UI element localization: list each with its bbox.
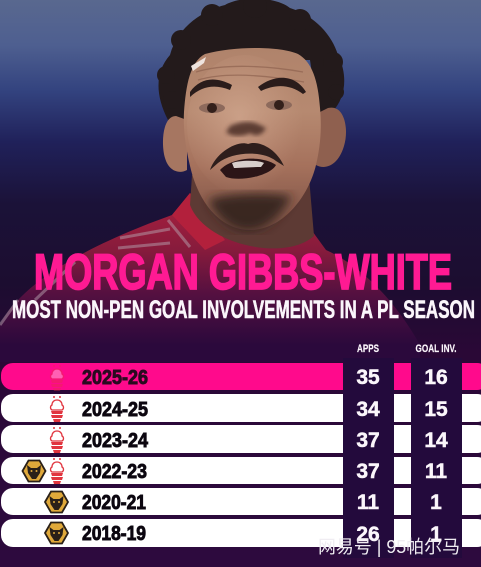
row: 2020-21: 2020-21 [82, 492, 146, 514]
row: 2022-23 [1, 457, 481, 484]
column: goal involvements: 16 [424, 366, 448, 389]
ears [163, 116, 187, 172]
column: goal involvements: 1 [430, 491, 442, 514]
forehead highlight [191, 57, 206, 71]
row: 2020-21 [1, 488, 481, 515]
column: goal involvements: 1 [430, 523, 442, 546]
right eye [266, 100, 292, 110]
hair [157, 0, 344, 120]
row: 2025-26: 2025-26 [82, 367, 148, 389]
column: goal involvements: 11 [425, 460, 447, 483]
column: goal involvements [411, 343, 462, 558]
column: goal involvements: GOAL INV. [416, 343, 456, 355]
neck [190, 165, 314, 248]
column: apps: 37 [356, 460, 380, 483]
column: apps: 26 [356, 523, 380, 546]
row: 2024-25 [1, 394, 481, 422]
row: 2023-24 [1, 425, 481, 453]
moustache [210, 143, 284, 170]
column: apps: 11 [357, 491, 379, 514]
column: goal involvements: 15 [424, 398, 448, 421]
column: apps: 37 [356, 429, 380, 452]
column: apps: 35 [356, 366, 380, 389]
left eye [199, 103, 225, 113]
row: 2024-25: 2024-25 [82, 399, 148, 421]
column: apps: 34 [356, 398, 380, 421]
row: 2018-19: 2018-19 [82, 523, 146, 545]
row: 2023-24: 2023-24 [82, 430, 149, 452]
eyebrows [190, 80, 232, 97]
column: apps [343, 343, 394, 558]
shirt [0, 193, 420, 362]
nose [226, 122, 266, 136]
row: 2025-26 [1, 363, 481, 391]
forehead wrinkles [196, 66, 304, 82]
face [184, 48, 321, 230]
player photo [0, 0, 420, 362]
row: 2022-23: 2022-23 [82, 461, 147, 483]
watermark: 网易号 | 95帕尔马 [318, 537, 460, 557]
column: goal involvements: 14 [424, 429, 448, 452]
mouth [220, 159, 276, 179]
row: 2018-19 [1, 519, 481, 547]
table [1, 363, 481, 547]
beard [208, 193, 292, 231]
column: apps: APPS [357, 343, 379, 355]
